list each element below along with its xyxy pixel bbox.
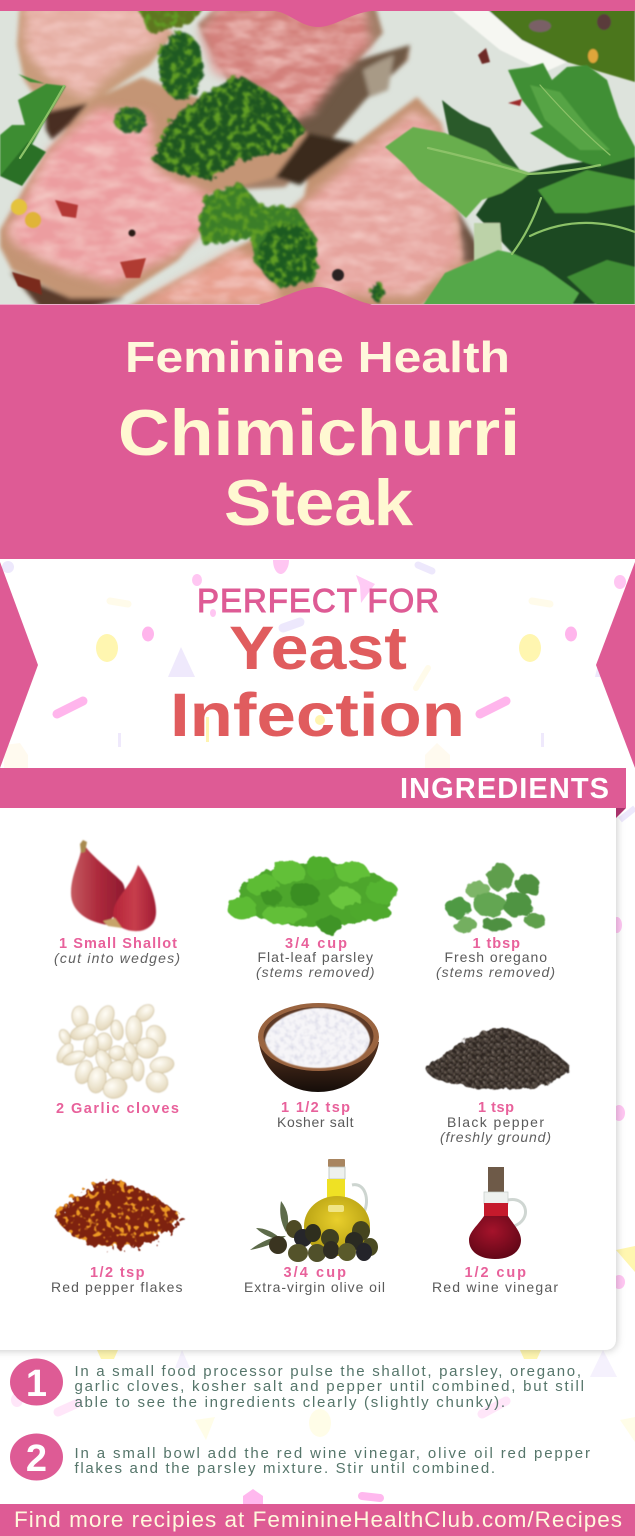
parsley leaves (0, 63, 635, 308)
label: oregano: (stems removed) (436, 964, 555, 980)
label: red pepper flakes: Red pepper flakes (51, 1279, 182, 1295)
step 2 (10, 1434, 590, 1480)
heading: ingredients: INGREDIENTS (400, 773, 609, 805)
footer link text: Find more recipies at FeminineHealthClub.com/Recipes (14, 1507, 622, 1532)
label: black pepper: 1 tsp (478, 1100, 514, 1116)
label: parsley: (stems removed) (256, 964, 374, 980)
label: red wine vinegar (432, 1265, 558, 1295)
heading: Yeast: Yeast (229, 614, 407, 682)
olive branch (250, 1201, 288, 1250)
label: parsley (256, 936, 374, 980)
label: red wine vinegar: Red wine vinegar (432, 1279, 558, 1295)
label: oregano: Fresh oregano (444, 949, 547, 965)
confetti background behind the ribbon (2, 560, 626, 768)
label: garlic: 2 Garlic cloves (56, 1101, 179, 1117)
subheading: perfect for: PERFECT FOR (197, 582, 439, 619)
label: oregano (436, 936, 555, 980)
ribbon left notch (0, 562, 38, 768)
plate (0, 11, 635, 304)
top pink band with notch (0, 0, 635, 27)
step 1 (10, 1358, 584, 1411)
label: kosher salt: Kosher salt (277, 1114, 354, 1130)
icon: red wine vinegar bottle (469, 1167, 525, 1259)
step number badge 1 (10, 1358, 63, 1406)
parsley stems and veins (20, 85, 635, 254)
step 2 text: flakes and the parsley mixture. Stir until combined. (74, 1460, 495, 1477)
ingredients ribbon (0, 768, 626, 818)
label: oregano: 1 tbsp (472, 936, 520, 952)
ribbon right notch (596, 562, 635, 768)
step 1 text: garlic cloves, kosher salt and pepper until combined, but still (74, 1378, 584, 1395)
label: shallot: 1 Small Shallot (59, 936, 177, 952)
label: parsley: 3/4 cup (285, 936, 347, 952)
step 1 text: In a small food processor pulse the shallot, parsley, oregano, (74, 1363, 581, 1380)
label: kosher salt (277, 1100, 354, 1130)
label: olive oil: 3/4 cup (284, 1265, 346, 1281)
icon: oregano (445, 863, 545, 933)
step number badge 1: 1 (26, 1363, 47, 1405)
label: olive oil (244, 1265, 385, 1295)
icon: shallot (71, 840, 156, 931)
ingredients card (0, 806, 616, 1350)
bottle (304, 1159, 370, 1256)
label: shallot (54, 936, 180, 966)
icon: bowl of kosher salt (258, 1003, 379, 1092)
olives (269, 1220, 378, 1262)
label: black pepper: (freshly ground) (440, 1129, 551, 1145)
icon: garlic cloves (54, 1001, 175, 1102)
serving bowl with sauce (449, 8, 635, 82)
title panel (0, 287, 635, 559)
step number badge 2 (10, 1434, 63, 1480)
step 1 text (74, 1363, 584, 1411)
heading: Infection: Infection (170, 681, 465, 749)
title: Chimichurri: Chimichurri (118, 396, 520, 469)
pepper and chilli specks (11, 48, 522, 295)
title: Steak: Steak (224, 466, 414, 539)
icon: black peppercorns (426, 1028, 568, 1089)
footer bar (0, 1504, 635, 1536)
label: black pepper (440, 1100, 551, 1145)
chimichurri sauce (114, 8, 385, 302)
icon: olive oil bottle and olives (250, 1159, 378, 1262)
label: parsley: Flat-leaf parsley (258, 949, 373, 965)
label: olive oil: Extra-virgin olive oil (244, 1279, 385, 1295)
label: red pepper flakes (51, 1265, 182, 1295)
label: red pepper flakes: 1/2 tsp (90, 1265, 145, 1281)
pink meat centers (8, 5, 462, 305)
icon: flat-leaf parsley (228, 856, 398, 934)
hero photo: sliced steak with chimichurri and parsley (0, 5, 635, 308)
step 2 text: In a small bowl add the red wine vinegar, olive oil red pepper (74, 1445, 590, 1462)
confetti behind ingredients card at the right edge and under it (11, 808, 635, 1504)
step number badge 2: 2 (26, 1438, 47, 1480)
label: red wine vinegar: 1/2 cup (464, 1265, 526, 1281)
label: black pepper: Black pepper (447, 1114, 544, 1130)
title: Feminine Health: Feminine Health (125, 333, 510, 382)
label: kosher salt: 1 1/2 tsp (281, 1100, 350, 1116)
label: shallot: (cut into wedges) (54, 950, 180, 966)
steak slices (0, 5, 478, 308)
step 1 text: able to see the ingredients clearly (slightly chunky). (74, 1394, 505, 1411)
icon: red pepper flakes (54, 1180, 182, 1248)
step 2 text (74, 1445, 590, 1477)
